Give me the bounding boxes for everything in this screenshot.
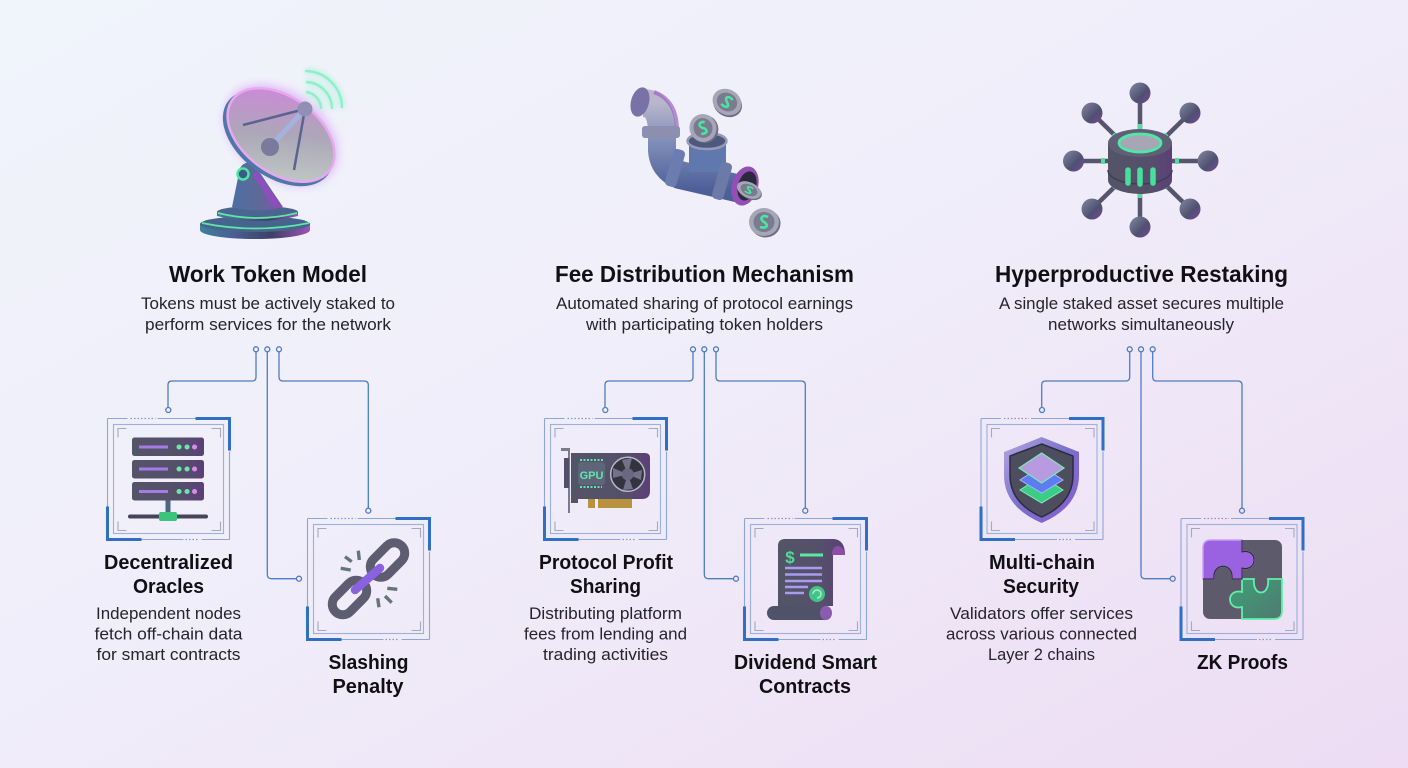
- text: for smart contracts: [96, 646, 240, 664]
- connectors: [603, 347, 808, 581]
- description: with participating token holders: [585, 316, 823, 334]
- text: Distributing platform: [529, 605, 682, 623]
- description: [999, 295, 1284, 334]
- card: Dividend Smart Contracts: [734, 518, 877, 698]
- text: [94, 605, 243, 664]
- text: fetch off-chain data: [94, 626, 243, 644]
- connectors: [1040, 347, 1244, 581]
- panel: Hyperproductive Restaking: [946, 82, 1303, 674]
- title: Security: [1003, 576, 1080, 598]
- card: ZK Proofs: [1181, 518, 1303, 674]
- frame: [308, 518, 430, 640]
- title: Protocol Profit: [539, 552, 673, 574]
- title: [734, 652, 877, 698]
- text: Validators offer services: [950, 605, 1133, 623]
- title: Multi-chain: [989, 552, 1095, 574]
- title: Sharing: [570, 576, 641, 598]
- frame: [108, 418, 230, 540]
- title: [989, 552, 1095, 598]
- heading: Work Token Model: [169, 261, 367, 287]
- connectors: [166, 347, 371, 581]
- title: Slashing: [328, 652, 408, 674]
- heading: Hyperproductive Restaking: [995, 261, 1288, 287]
- title: [328, 652, 408, 698]
- panel: Fee Distribution Mechanism: [524, 84, 877, 698]
- text: [524, 605, 687, 664]
- description: Automated sharing of protocol earnings: [556, 295, 853, 313]
- text: trading activities: [543, 646, 668, 664]
- text: Independent nodes: [96, 605, 241, 623]
- icon: server rack: [128, 438, 208, 521]
- title: [104, 552, 233, 598]
- icon: satellite dish: [200, 65, 356, 239]
- icon: contract scroll: [767, 539, 845, 620]
- title: ZK Proofs: [1197, 652, 1288, 674]
- icon: broken chain: [328, 538, 409, 619]
- text: fees from lending and: [524, 626, 687, 644]
- card: Slashing Penalty: [308, 518, 430, 698]
- icon: restaking hub: [1063, 82, 1218, 238]
- title: [539, 552, 673, 598]
- heading: Fee Distribution Mechanism: [555, 261, 854, 287]
- title: Dividend Smart: [734, 652, 877, 674]
- description: [556, 295, 853, 334]
- title: Oracles: [133, 576, 204, 598]
- icon: GPU card: GPU: [580, 470, 603, 482]
- text: [946, 605, 1137, 664]
- title: Decentralized: [104, 552, 233, 574]
- title: Contracts: [759, 676, 851, 698]
- icon: GPU card: [561, 448, 650, 513]
- frame: [744, 518, 866, 640]
- description: [141, 295, 395, 334]
- icon: pipe with coins: [627, 84, 780, 238]
- text: across various connected: [946, 626, 1137, 644]
- frame: [544, 418, 666, 540]
- icon: contract scroll: $: [785, 548, 795, 567]
- frame: [981, 418, 1103, 540]
- card: Protocol Profit Sharing: [524, 418, 687, 664]
- description: networks simultaneously: [1048, 316, 1235, 334]
- card: Decentralized Oracles: [94, 418, 243, 664]
- description: A single staked asset secures multiple: [999, 295, 1284, 313]
- card: Multi-chain Security: [946, 418, 1137, 664]
- icon: shield with layers: [1004, 437, 1079, 523]
- description: perform services for the network: [145, 316, 392, 334]
- panel: Work Token Model: [94, 65, 430, 698]
- icon: puzzle pieces: [1203, 540, 1282, 619]
- frame: [1181, 518, 1303, 640]
- title: Penalty: [332, 676, 404, 698]
- text: Layer 2 chains: [988, 646, 1095, 664]
- description: Tokens must be actively staked to: [141, 295, 395, 313]
